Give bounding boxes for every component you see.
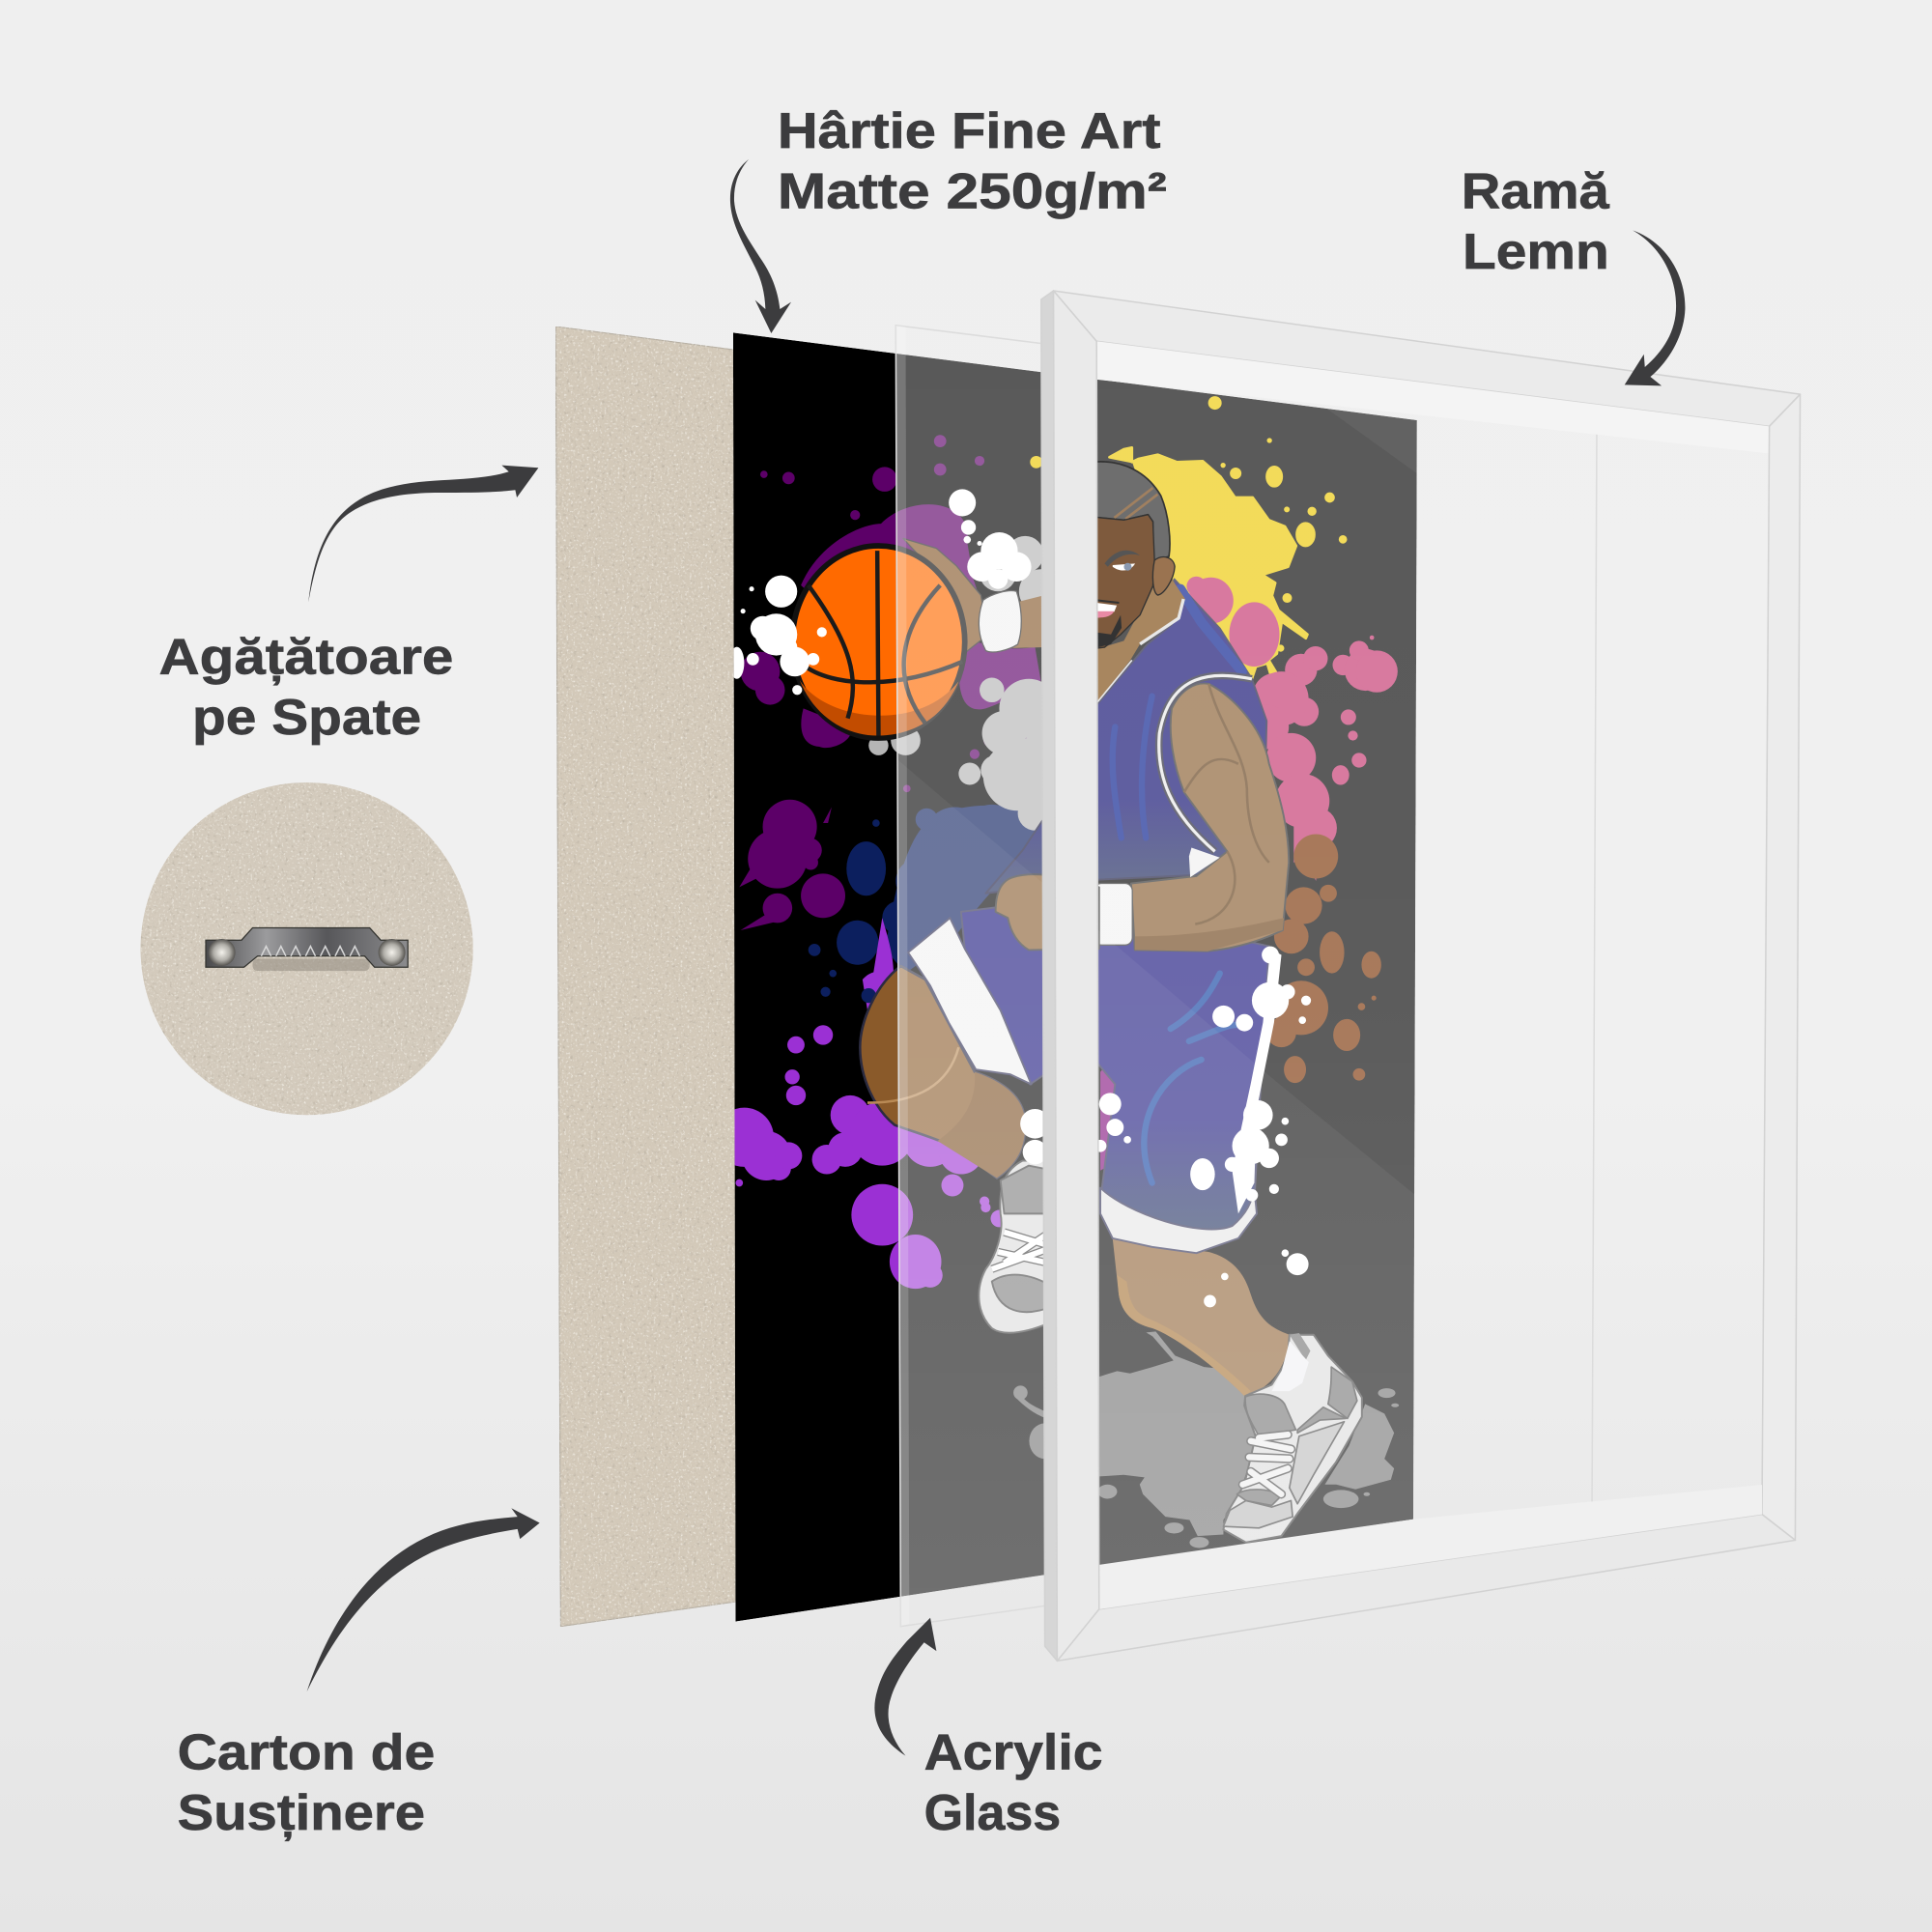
splash: navy (809, 801, 1054, 997)
frame inner lip top (1096, 341, 1770, 453)
splash: dark purple (739, 435, 1042, 930)
mouth (1092, 602, 1117, 611)
label: Acrylic Glass: Acrylic (924, 1725, 1103, 1781)
poster black background (733, 332, 1417, 1622)
eye (1113, 563, 1135, 571)
hair (1092, 462, 1170, 561)
frame right bar (1762, 394, 1801, 1540)
label: Ramă Lemn: Lemn (1463, 224, 1609, 280)
frame top bar (1054, 291, 1801, 426)
neck (1097, 580, 1185, 702)
toe cap (1223, 1500, 1293, 1528)
back shoe (978, 1159, 1043, 1334)
panel: acrylic glass sheet (895, 326, 1597, 1627)
laces (1242, 1435, 1291, 1494)
fist (996, 874, 1099, 950)
leg and front shoe traced (1113, 1238, 1362, 1543)
jersey armhole piping (1159, 675, 1252, 851)
glare on poster (907, 410, 1416, 1291)
label: Acrylic Glass (924, 1725, 1103, 1841)
cardboard circle (140, 782, 473, 1115)
label: Hârtie Fine Art Matte 250g/m²: Hârtie Fine Art (778, 103, 1161, 159)
arrow: to cardboard (307, 1508, 540, 1691)
sock (1271, 1341, 1309, 1391)
frame bottom bar (1057, 1515, 1795, 1661)
heel patch (1290, 1333, 1310, 1360)
splash: white paint (729, 489, 1311, 1307)
calf (1113, 1238, 1290, 1396)
label: Carton de Susținere (178, 1725, 435, 1841)
upper arm (1131, 683, 1289, 952)
panel: wooden frame (1041, 291, 1801, 1661)
label: Ramă Lemn (1462, 164, 1610, 280)
label: Hârtie Fine Art Matte 250g/m² (778, 103, 1167, 220)
label: Acrylic Glass: Glass (924, 1785, 1061, 1841)
splash: magenta (1100, 1070, 1115, 1171)
inset: back hanger detail (140, 782, 473, 1115)
label: Agățătoare pe Spate: pe Spate (192, 690, 421, 746)
label: Carton de Susținere: Susținere (178, 1785, 425, 1841)
label: Ramă Lemn: Ramă (1462, 164, 1610, 220)
goatee (1092, 615, 1122, 649)
shorts (961, 899, 1269, 1238)
sawtooth hanger (206, 927, 408, 967)
shorts white trim (908, 918, 1032, 1084)
label: Agățătoare pe Spate: Agățătoare (159, 630, 453, 686)
calf shading (1117, 1275, 1251, 1396)
arrow: to frame (1625, 230, 1685, 385)
player illustration (792, 538, 1362, 1543)
shorts swirl marks (1144, 974, 1244, 1182)
arrow: to fine art paper (730, 159, 791, 333)
splash: violet (715, 918, 1008, 1289)
panel: backing cardboard (555, 327, 735, 1627)
basketball (792, 546, 965, 738)
back panel (1328, 1367, 1357, 1418)
raised hand (903, 538, 988, 653)
collar piping (1140, 599, 1183, 644)
splash: grey ground (1013, 1331, 1399, 1548)
frame inner lip bottom (1099, 1485, 1762, 1609)
eyebrow (1104, 551, 1140, 567)
splash: yellow (1109, 440, 1346, 681)
face (1092, 515, 1154, 649)
ear (1152, 557, 1175, 595)
acrylic tint over poster (896, 354, 1417, 1596)
panel: printed poster (733, 332, 1417, 1621)
label: Hârtie Fine Art Matte 250g/m²: Matte 250g/m² (778, 164, 1167, 220)
arrow: to acrylic glass (874, 1618, 936, 1756)
wristband lower (1094, 884, 1132, 945)
splash: pink (1186, 577, 1398, 881)
label: Carton de Susținere: Carton de (178, 1725, 435, 1781)
raised thigh (860, 966, 1025, 1178)
side panel (1297, 1407, 1346, 1433)
splash: brown (1266, 835, 1381, 1083)
tongue (1245, 1394, 1295, 1436)
jersey (985, 579, 1266, 894)
splash: grey behind the body (868, 535, 1041, 831)
frame left side face (1041, 291, 1057, 1661)
arrow: to cardboard from hanger (308, 466, 538, 602)
sawtooth hanger shadow (252, 958, 370, 971)
player head (1092, 462, 1185, 702)
wristband upper (979, 591, 1021, 652)
shoe sole (1223, 1335, 1362, 1543)
label: Agățătoare pe Spate (159, 630, 453, 746)
frame left bar (1054, 291, 1099, 1661)
